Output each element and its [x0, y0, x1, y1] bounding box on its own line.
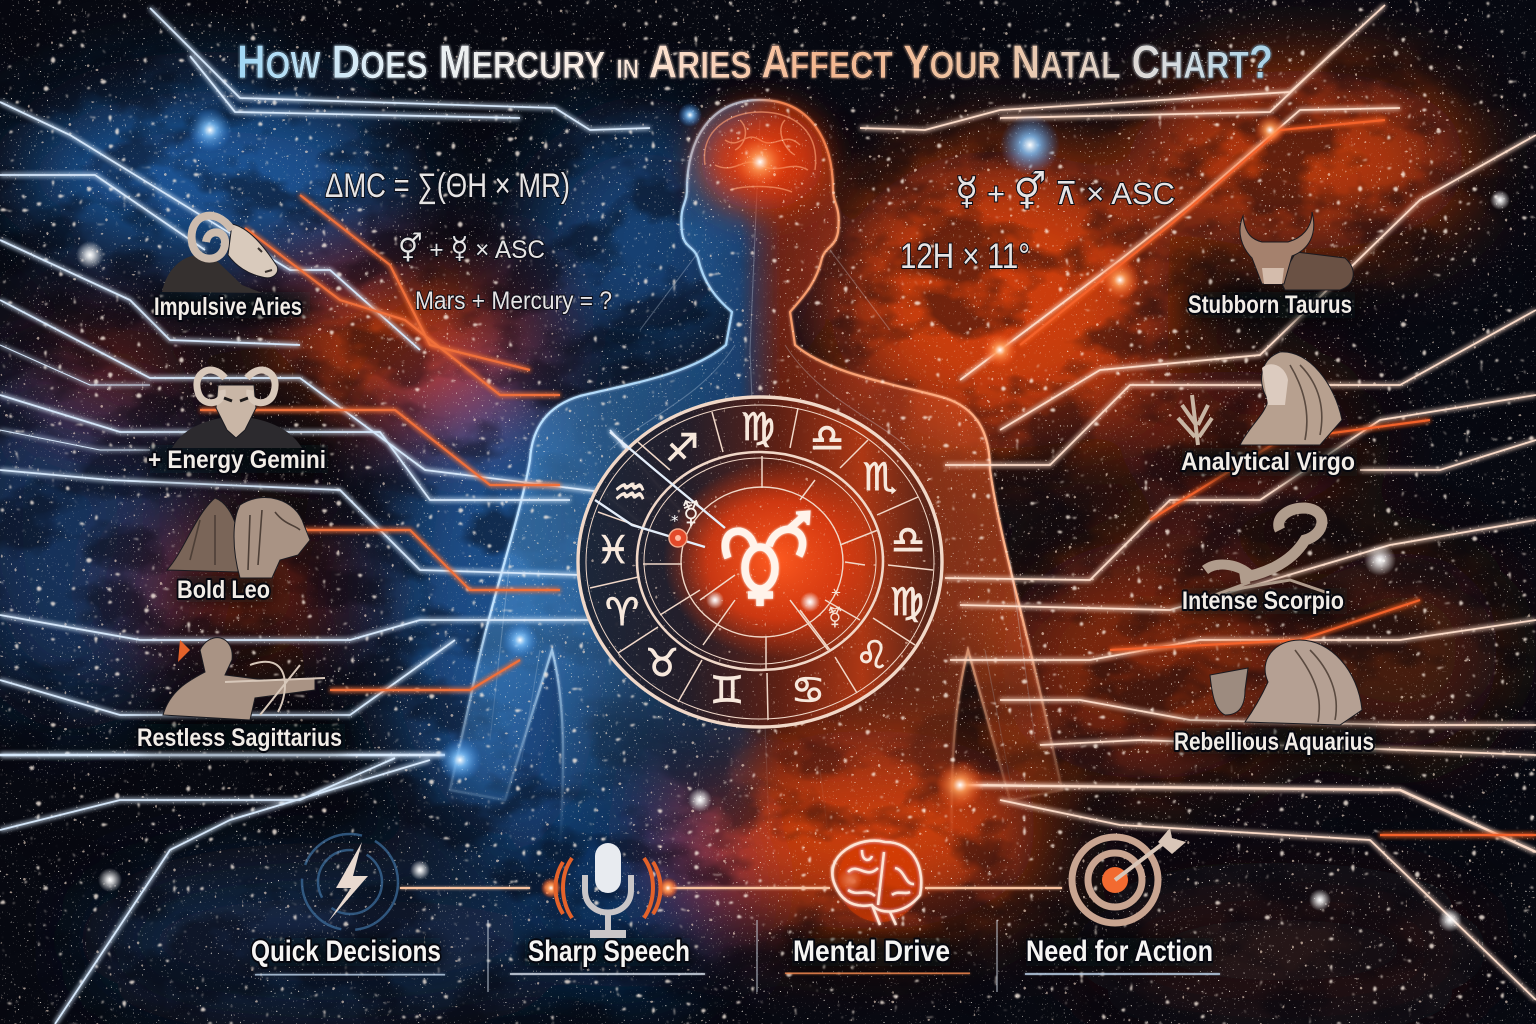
label: Restless Sagittarius: Restless Sagittarius: [137, 724, 342, 752]
formula: glyph sum ascendant: ⚥ + ☿ × ASC: [398, 231, 545, 266]
label: Sharp Speech: Sharp Speech: [528, 935, 690, 968]
icon: microphone: [556, 843, 660, 938]
brain glow in head: [700, 110, 824, 210]
bottom dividers: [488, 920, 997, 992]
wheel pointer line and marker: *: [671, 512, 679, 530]
wheel zodiac glyphs: ♎︎: [810, 416, 844, 460]
formula: right glyph sum: ☿ + ⚥ ⊼ × ASC: [955, 169, 1175, 213]
label: Impulsive Aries: Impulsive Aries: [154, 293, 302, 321]
label underlines: [255, 973, 1220, 975]
wheel spokes: [590, 408, 933, 720]
label: Need for Action: Need for Action: [1026, 935, 1213, 968]
wheel rings: [578, 397, 942, 727]
wheel zodiac glyphs: ♉︎: [645, 641, 679, 685]
wheel pointer line and marker: ⚹: [831, 582, 841, 600]
zodiac wheel: [578, 397, 942, 727]
icon: horned face, Gemini: [172, 370, 302, 448]
formula: 12H by 11 degrees: 12H × 11°: [900, 237, 1030, 276]
icon: water bearer, Aquarius: [1210, 640, 1362, 725]
label: Rebellious Aquarius: Rebellious Aquarius: [1174, 728, 1374, 756]
formula: delta MC: ΔMC = ∑(ΘH × MR): [325, 167, 570, 205]
icon: scorpion, Scorpio: [1205, 508, 1325, 595]
wheel hub glow: [663, 462, 887, 658]
wheel zodiac glyphs: ♍︎: [741, 405, 775, 449]
icon: maiden and wheat, Virgo: [1178, 352, 1342, 445]
icon: archer, Sagittarius: [163, 638, 325, 720]
wheel pointer line and marker: [595, 432, 843, 629]
wheel zodiac glyphs: ♈︎: [605, 590, 639, 634]
wheel zodiac glyphs: ♏︎: [863, 455, 897, 499]
circuit lines: left orange: [200, 195, 560, 690]
label: Bold Leo: Bold Leo: [177, 576, 270, 604]
human figure: [450, 100, 1062, 850]
wheel zodiac glyphs: ♍︎: [890, 580, 924, 624]
label: Analytical Virgo: Analytical Virgo: [1181, 448, 1355, 476]
bottom connector line: [400, 878, 1062, 898]
wheel pointer line and marker: ⚧: [827, 605, 843, 629]
wheel pointer line and marker: ⚧: [681, 499, 701, 528]
wheel zodiac glyphs: ♋︎: [791, 668, 825, 712]
circuit lines: right accents: [1020, 120, 1536, 835]
label: Energy Gemini: + Energy Gemini: [148, 446, 326, 474]
formula: mars plus mercury: Mars + Mercury = ?: [415, 287, 612, 315]
wheel zodiac glyphs: ♎︎: [891, 518, 925, 562]
circuit lines: left blue and white: [0, 8, 725, 1024]
label: Stubborn Taurus: Stubborn Taurus: [1188, 291, 1352, 319]
icon: bull, Taurus: [1240, 212, 1353, 290]
icon: target with arrow: [1072, 828, 1186, 923]
wheel zodiac glyphs: ♓︎: [596, 528, 630, 572]
dark backing behind side labels and bottom text: [140, 292, 1376, 966]
title: HOW DOES MERCURY IN ARIES AFFECT YOUR NATAL CHART?: [237, 35, 1273, 88]
icon: lightning bolt: [302, 834, 398, 930]
label: Mental Drive: Mental Drive: [793, 935, 950, 968]
wheel zodiac glyphs: ♐︎: [665, 426, 699, 470]
wheel stars: [578, 397, 942, 727]
icon: ram, Aries: [162, 216, 278, 293]
wheel zodiac glyphs: ♊︎: [710, 668, 744, 712]
wheel zodiac glyphs: ♌︎: [855, 633, 889, 677]
icon: brain: [832, 838, 922, 925]
wheel zodiac glyphs: [596, 405, 925, 712]
wheel zodiac glyphs: ♒︎: [613, 470, 647, 514]
icon: lion and figure, Leo: [167, 498, 310, 578]
central Mercury-Mars symbol: [725, 512, 809, 606]
wheel disc: [578, 397, 942, 727]
bright star sparkles: [76, 103, 1510, 932]
label: Intense Scorpio: Intense Scorpio: [1182, 587, 1344, 615]
label: Quick Decisions: Quick Decisions: [251, 935, 441, 968]
circuit lines: right orange and white: [860, 5, 1536, 1000]
